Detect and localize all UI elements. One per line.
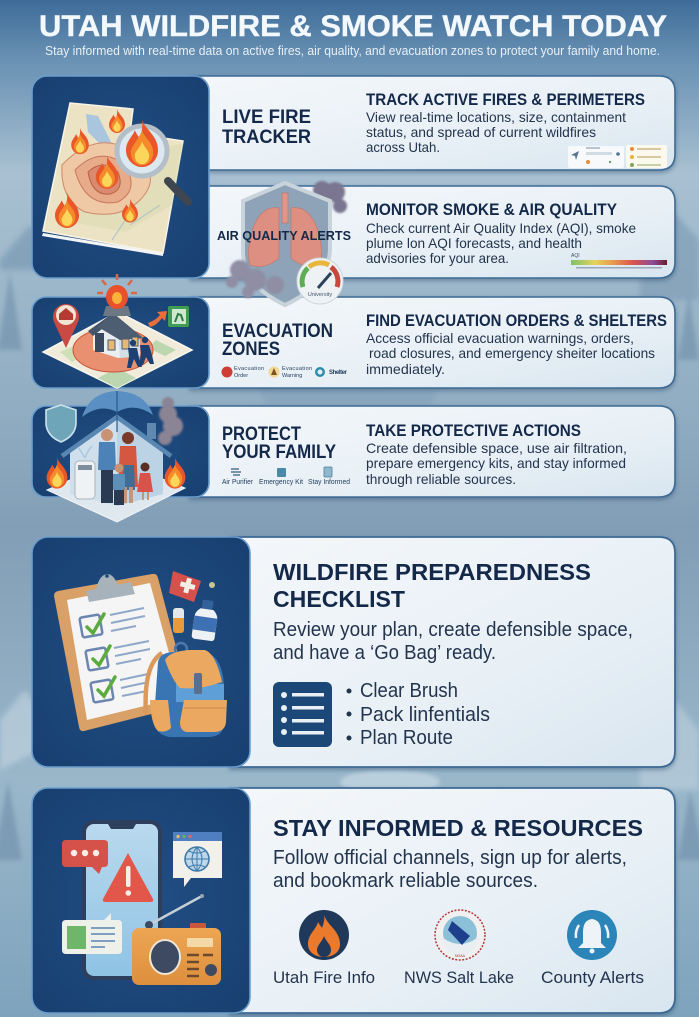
heading: monitor smoke: MONITOR SMOKE & AIR QUALITY bbox=[366, 201, 617, 219]
icon: bottle bbox=[191, 599, 220, 641]
legend: evacuation status: Evacuation bbox=[282, 366, 312, 372]
icon: first aid kit bbox=[169, 571, 215, 602]
label: protect your family: YOUR FAMILY bbox=[222, 442, 336, 463]
icon: isometric map base bbox=[43, 312, 192, 388]
legend: evacuation status: Warning bbox=[282, 373, 302, 379]
heading: wildfire preparedness checklist: CHECKLIST bbox=[273, 586, 406, 612]
icon: umbrella bbox=[82, 391, 153, 432]
text: monitor smoke description: advisories for your area. bbox=[366, 250, 509, 266]
tile: evacuation illustration bbox=[32, 274, 209, 388]
icon: chat bubble bbox=[62, 840, 108, 874]
icon: clipboard bbox=[54, 574, 190, 731]
tile: stay informed illustration bbox=[32, 788, 250, 1013]
icon: warning triangle bbox=[103, 853, 153, 902]
text: track active fires description: status, and spread of current wildfires bbox=[366, 124, 596, 140]
AQI scale bar: AQI bbox=[571, 253, 580, 259]
icon: magnifying glass bbox=[117, 119, 188, 202]
icon: AQI gauge: University bbox=[308, 292, 332, 298]
label: protect your family: PROTECT bbox=[222, 424, 301, 445]
tile: protect family illustration bbox=[32, 391, 209, 522]
text: protective actions description bbox=[366, 440, 627, 487]
small icons row: Emergency Kit bbox=[259, 479, 303, 486]
label: evacuation zones: EVACUATION bbox=[222, 321, 333, 342]
text: monitor smoke description: plume lon AQI forecasts, and health bbox=[366, 235, 582, 251]
text: evacuation description bbox=[366, 330, 655, 377]
text: protective actions description: prepare emergency kits, and stay informed bbox=[366, 455, 626, 471]
panel: air quality alerts bbox=[190, 186, 675, 278]
title: UTAH WILDFIRE & SMOKE WATCH TODAY bbox=[39, 10, 667, 43]
panel: evacuation zones bbox=[190, 297, 675, 388]
icon: smoke bbox=[158, 397, 183, 445]
text: evacuation description: road closures, and emergency sheiter locations bbox=[369, 345, 655, 361]
resource: NWS Salt Lake: NWS Salt Lake bbox=[404, 968, 514, 987]
heading: stay informed: STAY INFORMED & RESOURCES bbox=[273, 815, 643, 841]
resource: NWS Salt Lake bbox=[404, 910, 514, 987]
label: live fire tracker: LIVE FIRE bbox=[222, 107, 311, 128]
panel: live fire tracker bbox=[190, 76, 675, 170]
icon: platform bbox=[47, 460, 185, 522]
text: evacuation description: Access official evacuation warnings, orders, bbox=[366, 330, 634, 346]
icon: shield bbox=[243, 183, 330, 305]
checklist items: Pack linfentials bbox=[360, 704, 490, 726]
small icons row: Stay Informed bbox=[308, 479, 350, 486]
icon: arrow bbox=[148, 311, 167, 327]
heading: track active fires: TRACK ACTIVE FIRES & PERIMETERS bbox=[366, 91, 645, 109]
icon: smartphone bbox=[82, 820, 162, 980]
checklist items: Plan Route bbox=[360, 727, 453, 749]
air quality illustration bbox=[217, 181, 351, 305]
icon: family bbox=[98, 429, 153, 505]
text: protective actions description: Create defensible space, use air filtration, bbox=[366, 440, 627, 456]
text: stay informed description: Follow official channels, sign up for alerts, bbox=[273, 847, 627, 869]
legend: evacuation status bbox=[222, 366, 348, 379]
AQI scale bar bbox=[571, 253, 667, 268]
panel: stay informed and resources bbox=[230, 788, 675, 1013]
icon: location pin bbox=[53, 304, 79, 348]
panel: wildfire preparedness checklist bbox=[230, 537, 675, 767]
label: evacuation zones: ZONES bbox=[222, 339, 280, 360]
label: protect your family bbox=[222, 424, 336, 463]
icon: house bbox=[88, 313, 143, 358]
text: preparedness description: Review your plan, create defensible space, bbox=[273, 619, 633, 641]
label: air quality alerts: AIR QUALITY ALERTS bbox=[217, 228, 351, 243]
icon: radio bbox=[132, 894, 221, 985]
label: live fire tracker: TRACKER bbox=[222, 127, 311, 148]
icon: exit sign bbox=[168, 306, 189, 327]
text: preparedness description: and have a ‘Go Bag’ ready. bbox=[273, 642, 496, 664]
icon: browser globe bbox=[173, 832, 222, 887]
icon: flames bbox=[47, 457, 185, 489]
text: track active fires description: View real-time locations, size, containment bbox=[366, 109, 626, 125]
text: track active fires description: across Utah. bbox=[366, 139, 440, 155]
subtitle: Stay informed with real-time data on active fires, air quality, and evacuation zones to protect your family and home. bbox=[45, 44, 660, 58]
icon: fires on map bbox=[55, 109, 138, 228]
heading: wildfire preparedness checklist bbox=[273, 559, 591, 612]
resource: Utah Fire Info bbox=[273, 910, 375, 987]
label: evacuation zones bbox=[222, 321, 333, 360]
icon: lungs bbox=[249, 193, 321, 266]
icon: Utah map bbox=[42, 103, 183, 256]
icon: list bbox=[273, 682, 332, 747]
resource: County Alerts: County Alerts bbox=[541, 968, 644, 987]
heading: wildfire preparedness checklist: WILDFIRE PREPAREDNESS bbox=[273, 559, 591, 585]
text: monitor smoke description bbox=[366, 220, 636, 266]
icon: smoke clouds bbox=[309, 181, 347, 214]
icon: shield bbox=[46, 405, 76, 442]
legend: evacuation status: Order bbox=[234, 373, 248, 379]
text: track active fires description bbox=[366, 109, 626, 155]
heading: take protective actions: TAKE PROTECTIVE ACTIONS bbox=[366, 422, 581, 440]
icon: smoke lower bbox=[226, 260, 284, 298]
text: monitor smoke description: Check current Air Quality Index (AQI), smoke bbox=[366, 220, 636, 236]
icon: message card bbox=[62, 913, 122, 954]
icon: air purifier bbox=[75, 446, 95, 499]
icon: siren bbox=[97, 274, 137, 316]
text: stay informed description: and bookmark reliable sources. bbox=[273, 870, 538, 892]
label: live fire tracker bbox=[222, 107, 311, 148]
icon: house bbox=[62, 417, 171, 506]
text: protective actions description: through reliable sources. bbox=[366, 471, 516, 487]
small icons row: Air Purifier bbox=[222, 479, 254, 486]
tile: live fire tracker illustration bbox=[32, 76, 209, 278]
heading: find evacuation orders: FIND EVACUATION ORDERS & SHELTERS bbox=[366, 312, 667, 330]
checklist items: Clear Brush bbox=[360, 680, 458, 702]
icon: evacuating people bbox=[127, 337, 154, 368]
legend: evacuation status: Shelter bbox=[329, 370, 348, 376]
text: stay informed description bbox=[273, 847, 627, 892]
resource: NWS Salt Lake: NOAA bbox=[455, 954, 466, 958]
icon: evacuation zone bbox=[73, 328, 153, 372]
panel: protect your family bbox=[190, 406, 675, 497]
mini fire tracker widgets bbox=[568, 145, 667, 168]
legend: evacuation status: Evacuation bbox=[234, 366, 264, 372]
resource: Utah Fire Info: Utah Fire Info bbox=[273, 968, 375, 987]
tile: checklist illustration bbox=[32, 537, 250, 767]
icon: vial bbox=[173, 608, 184, 633]
text: evacuation description: immediately. bbox=[366, 361, 445, 377]
small icons row bbox=[222, 467, 350, 486]
resource: County Alerts bbox=[541, 910, 644, 987]
icon: backpack bbox=[146, 643, 227, 737]
text: preparedness description bbox=[273, 619, 633, 664]
checklist items bbox=[346, 680, 490, 749]
